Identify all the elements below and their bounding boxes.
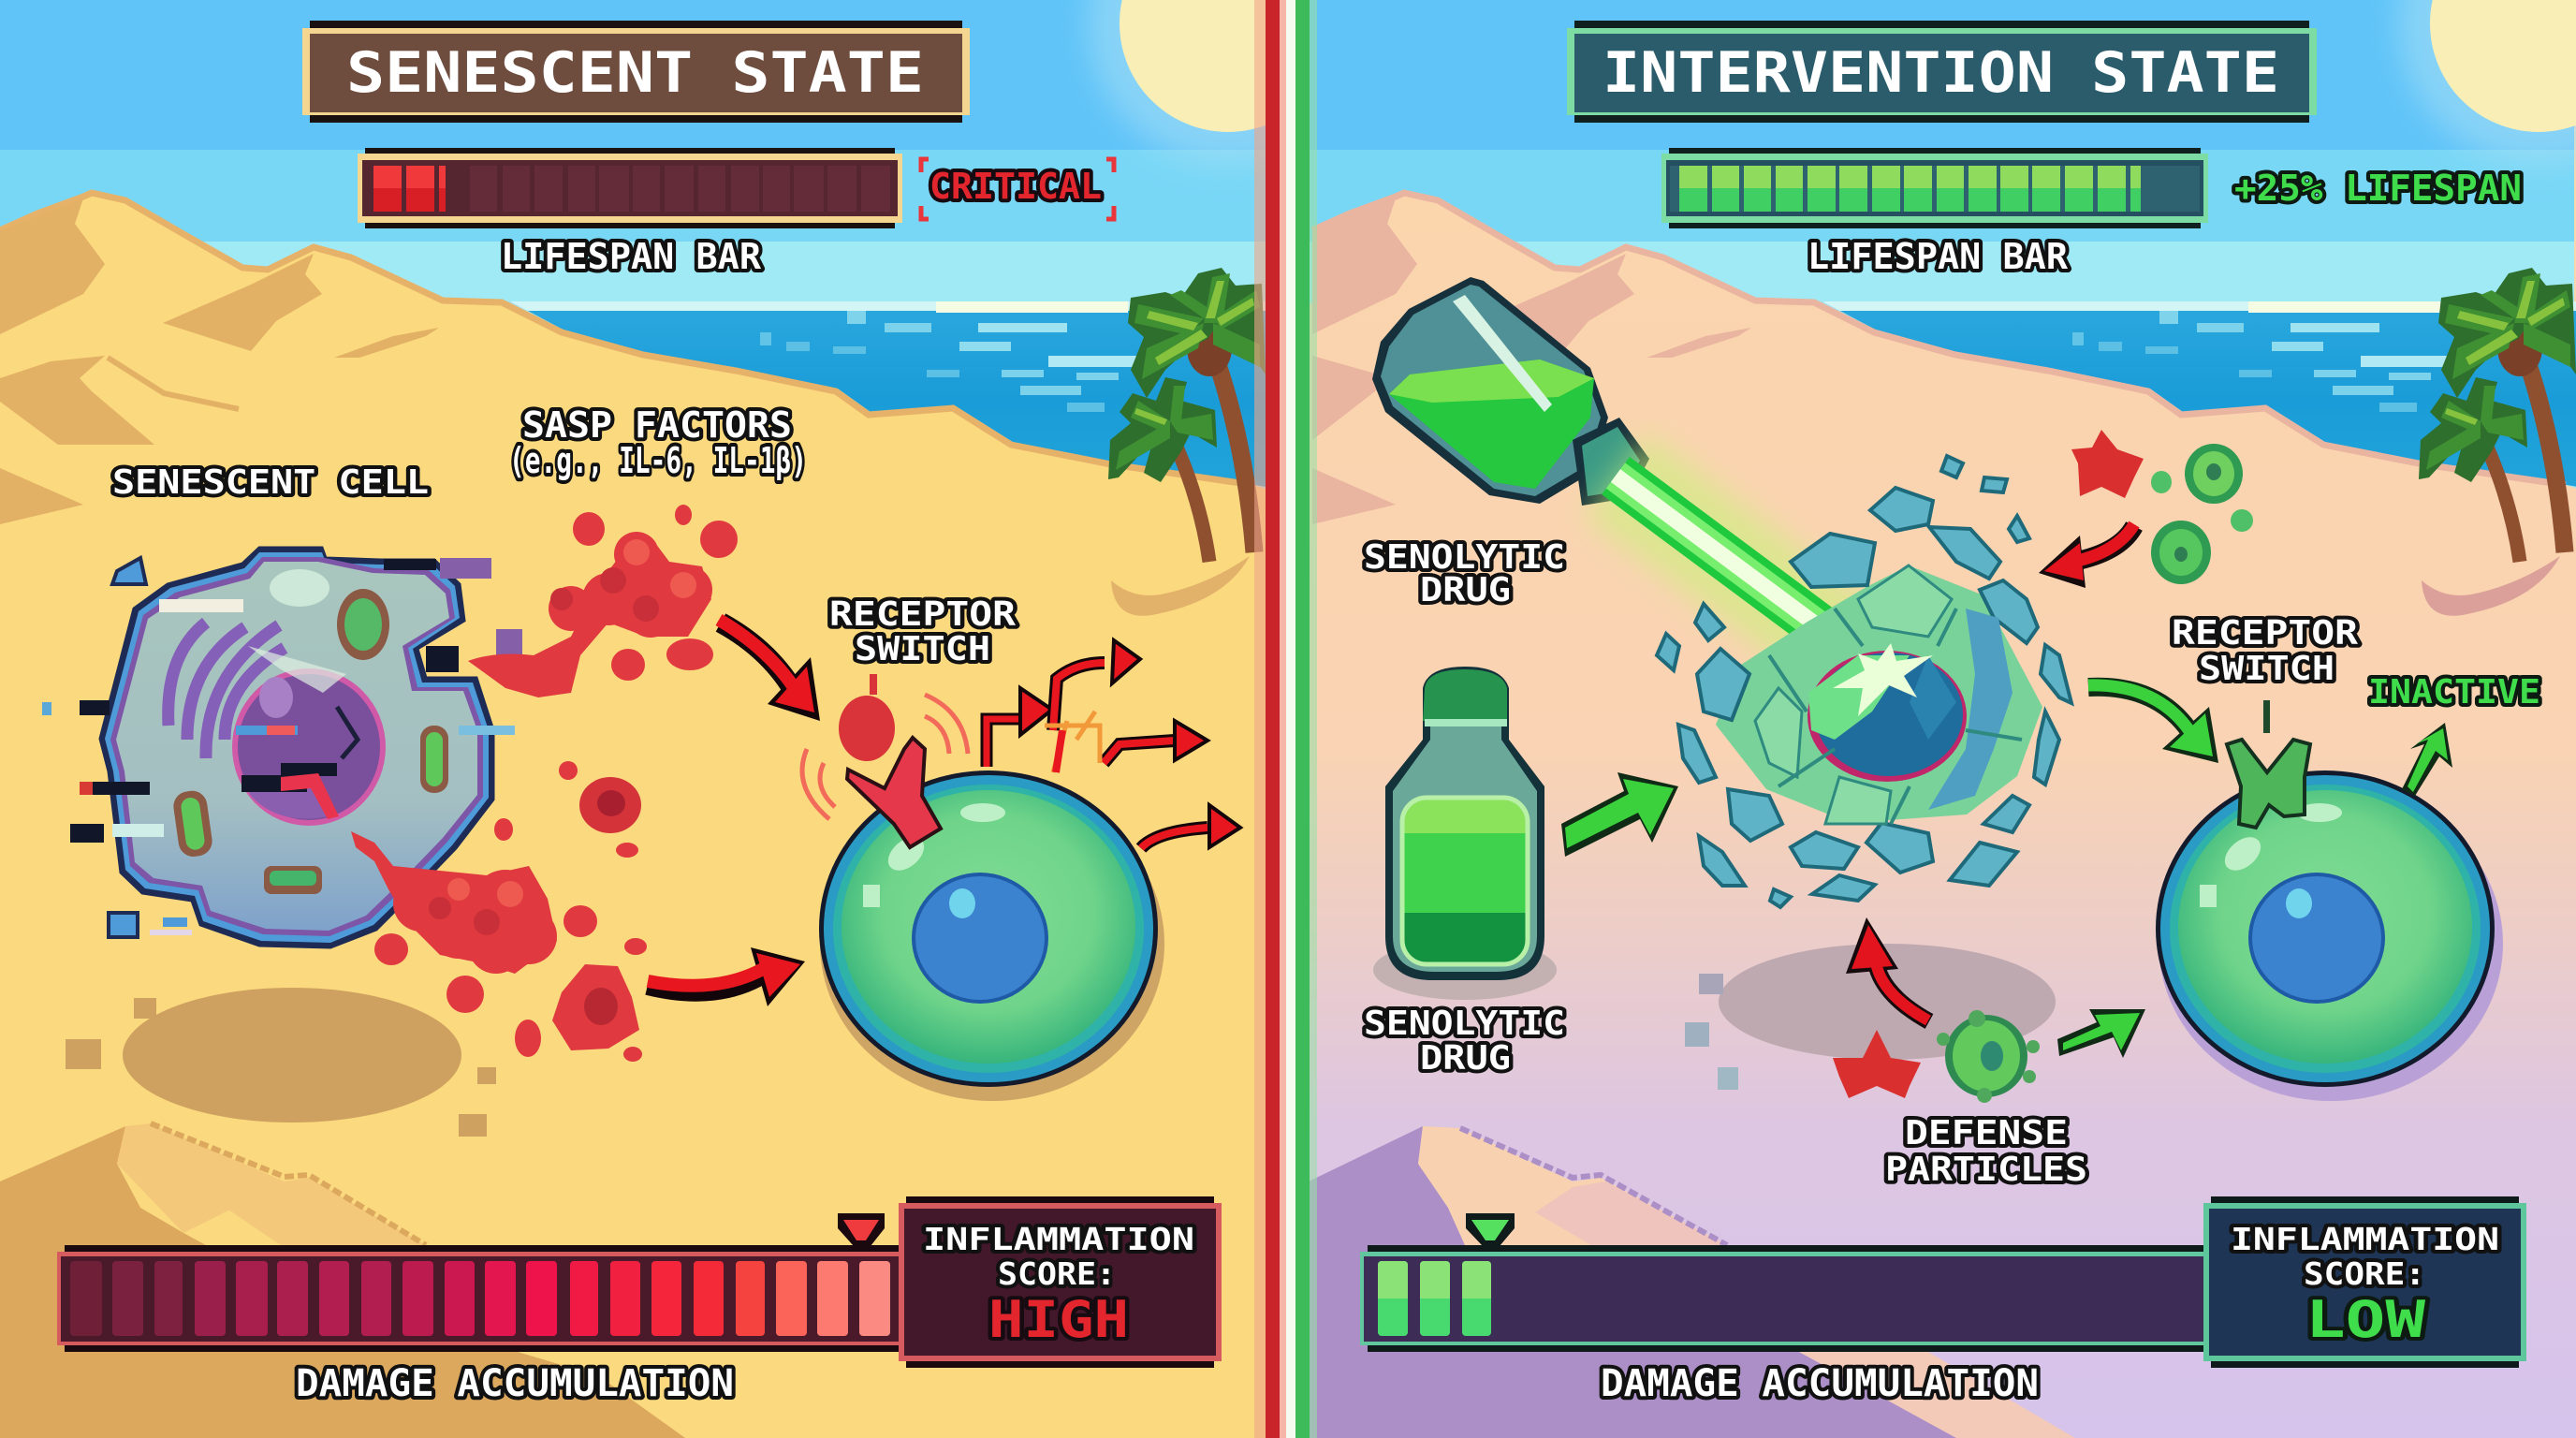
- label: senolytic drug upper: [1364, 538, 1565, 609]
- palm trees right: [2419, 268, 2576, 562]
- marker fill: high: [843, 1220, 879, 1240]
- label: defense particles: [1885, 1114, 2087, 1189]
- label: lifespan bar right: LIFESPAN BAR: [1808, 236, 2068, 277]
- receptor cell intervention side: [2156, 770, 2503, 1101]
- label: senolytic drug lower: [1364, 1005, 1565, 1078]
- impact burst: [1833, 643, 1933, 716]
- label: lifespan bar: LIFESPAN BAR: [501, 236, 761, 277]
- nucleus: [232, 668, 386, 826]
- arrow: sasp lower to receptor: [648, 947, 805, 1006]
- label: senolytic drug upper: DRUG: [1420, 571, 1511, 609]
- lifespan bar: extended: [1661, 148, 2208, 228]
- ocean: [505, 301, 1266, 498]
- icon: sun right: [2398, 0, 2576, 164]
- label: senescent cell: SENESCENT CELL: [112, 463, 429, 502]
- laser beam: [1616, 476, 1875, 668]
- label: damage accumulation: DAMAGE ACCUMULATION: [296, 1362, 734, 1405]
- damage segments: [70, 1261, 890, 1336]
- marker fill: low: [1471, 1220, 1509, 1240]
- score box: high: [899, 1196, 1222, 1368]
- marker: low: [1466, 1213, 1515, 1246]
- panel: senescent state background scene: [0, 0, 1368, 1438]
- lifespan segments: [1679, 166, 2141, 212]
- label: senolytic drug lower: DRUG: [1420, 1039, 1511, 1078]
- icon: tilted senolytic drug bottle: [1372, 277, 1649, 506]
- cracks: [1769, 609, 2022, 824]
- sand beach: [64, 197, 1266, 498]
- arrows: signal output: [987, 640, 1240, 848]
- empty segments: [470, 166, 890, 212]
- label: defense particles: PARTICLES: [1885, 1151, 2087, 1189]
- label: receptor switch: [829, 595, 1016, 668]
- arrow: green toward receptor: [2088, 685, 2218, 763]
- label: defense particles: DEFENSE: [1905, 1114, 2068, 1152]
- golgi: [168, 623, 285, 758]
- score box: low: [2203, 1196, 2526, 1368]
- dune shading: [0, 193, 1253, 524]
- label: sasp factors: (e.g., IL-6, IL-1β): [509, 440, 807, 481]
- sky bands right: [1309, 0, 2574, 303]
- defense particle and red debris: [1833, 1010, 2040, 1103]
- center divider: [1254, 0, 1317, 1438]
- score box: high: INFLAMMATION: [923, 1221, 1194, 1257]
- panel: intervention state background scene: [1309, 0, 2576, 1438]
- receptor cell senescent side: [819, 770, 1164, 1101]
- label: receptor switch: RECEPTOR: [829, 595, 1016, 634]
- ocean right: [1818, 301, 2576, 498]
- arrow: red up to cell: [1846, 917, 1929, 1021]
- arrow: red toward shattered cell: [2039, 524, 2134, 588]
- filled segments: [373, 166, 446, 212]
- receptor switch inactive: [2227, 700, 2310, 828]
- palm base shadow right: [2422, 556, 2560, 616]
- senescent cell: [42, 548, 522, 947]
- title: intervention state: [1567, 21, 2317, 123]
- badge: +25% lifespan: +25% LIFESPAN: [2234, 168, 2522, 209]
- score box: low: LOW: [2305, 1290, 2426, 1349]
- sasp factors cluster: [351, 505, 738, 1062]
- organelles: [337, 589, 389, 660]
- palm trees: [1108, 268, 1266, 562]
- label: senolytic drug upper: SENOLYTIC: [1364, 538, 1565, 577]
- arrow: green defense to receptor: [2057, 1009, 2145, 1058]
- title: senescent state: [302, 21, 970, 123]
- palm base shadow: [1111, 556, 1250, 616]
- label: senolytic drug lower: SENOLYTIC: [1364, 1005, 1565, 1043]
- lifespan bar: critical: [358, 148, 902, 228]
- shattered senescent cell: [1657, 456, 2071, 907]
- label: receptor switch right: SWITCH: [2199, 650, 2334, 688]
- score box: high: HIGH: [988, 1290, 1129, 1349]
- bottom dune right: [1309, 1126, 2075, 1438]
- damage segments low: [1378, 1261, 1491, 1336]
- ground shadow gray patch: [1685, 944, 2056, 1090]
- badge: critical: CRITICAL: [929, 166, 1102, 207]
- score box: low: SCORE:: [2304, 1255, 2425, 1292]
- glitch fragments: [42, 558, 522, 937]
- arrow: inactive signal: [2402, 723, 2452, 796]
- arrow: sasp upper to receptor: [719, 620, 820, 721]
- label: receptor switch: SWITCH: [855, 630, 990, 668]
- label: sasp factors: [509, 404, 807, 481]
- title: intervention state: INTERVENTION STATE: [1603, 40, 2279, 106]
- label: sasp factors: SASP FACTORS: [522, 404, 792, 446]
- sky bands: [0, 0, 1266, 303]
- label: damage accumulation right: DAMAGE ACCUMULATION: [1601, 1362, 2039, 1405]
- receptor switch activated: [802, 674, 968, 847]
- damage accumulation bar: low: [1360, 1245, 2207, 1352]
- arrow: bottle to cell: [1561, 772, 1678, 857]
- title: senescent state: SENESCENT STATE: [346, 40, 924, 106]
- icon: upright senolytic drug bottle: [1373, 667, 1557, 1000]
- label: receptor switch right: [2172, 614, 2358, 688]
- score box: high: SCORE:: [998, 1255, 1116, 1292]
- bottom dune: [0, 1123, 685, 1438]
- marker: high: [838, 1213, 885, 1246]
- ground shadow patch: [66, 988, 496, 1137]
- badge: inactive: INACTIVE: [2368, 673, 2540, 712]
- label: receptor switch right: RECEPTOR: [2172, 614, 2358, 653]
- damage accumulation bar: high: [57, 1245, 902, 1352]
- badge: critical: [921, 159, 1114, 219]
- upper debris particles: [2071, 430, 2253, 584]
- icon: sun: [1088, 0, 1368, 164]
- sand beach right: [1310, 189, 2576, 524]
- score box: low: INFLAMMATION: [2231, 1221, 2499, 1257]
